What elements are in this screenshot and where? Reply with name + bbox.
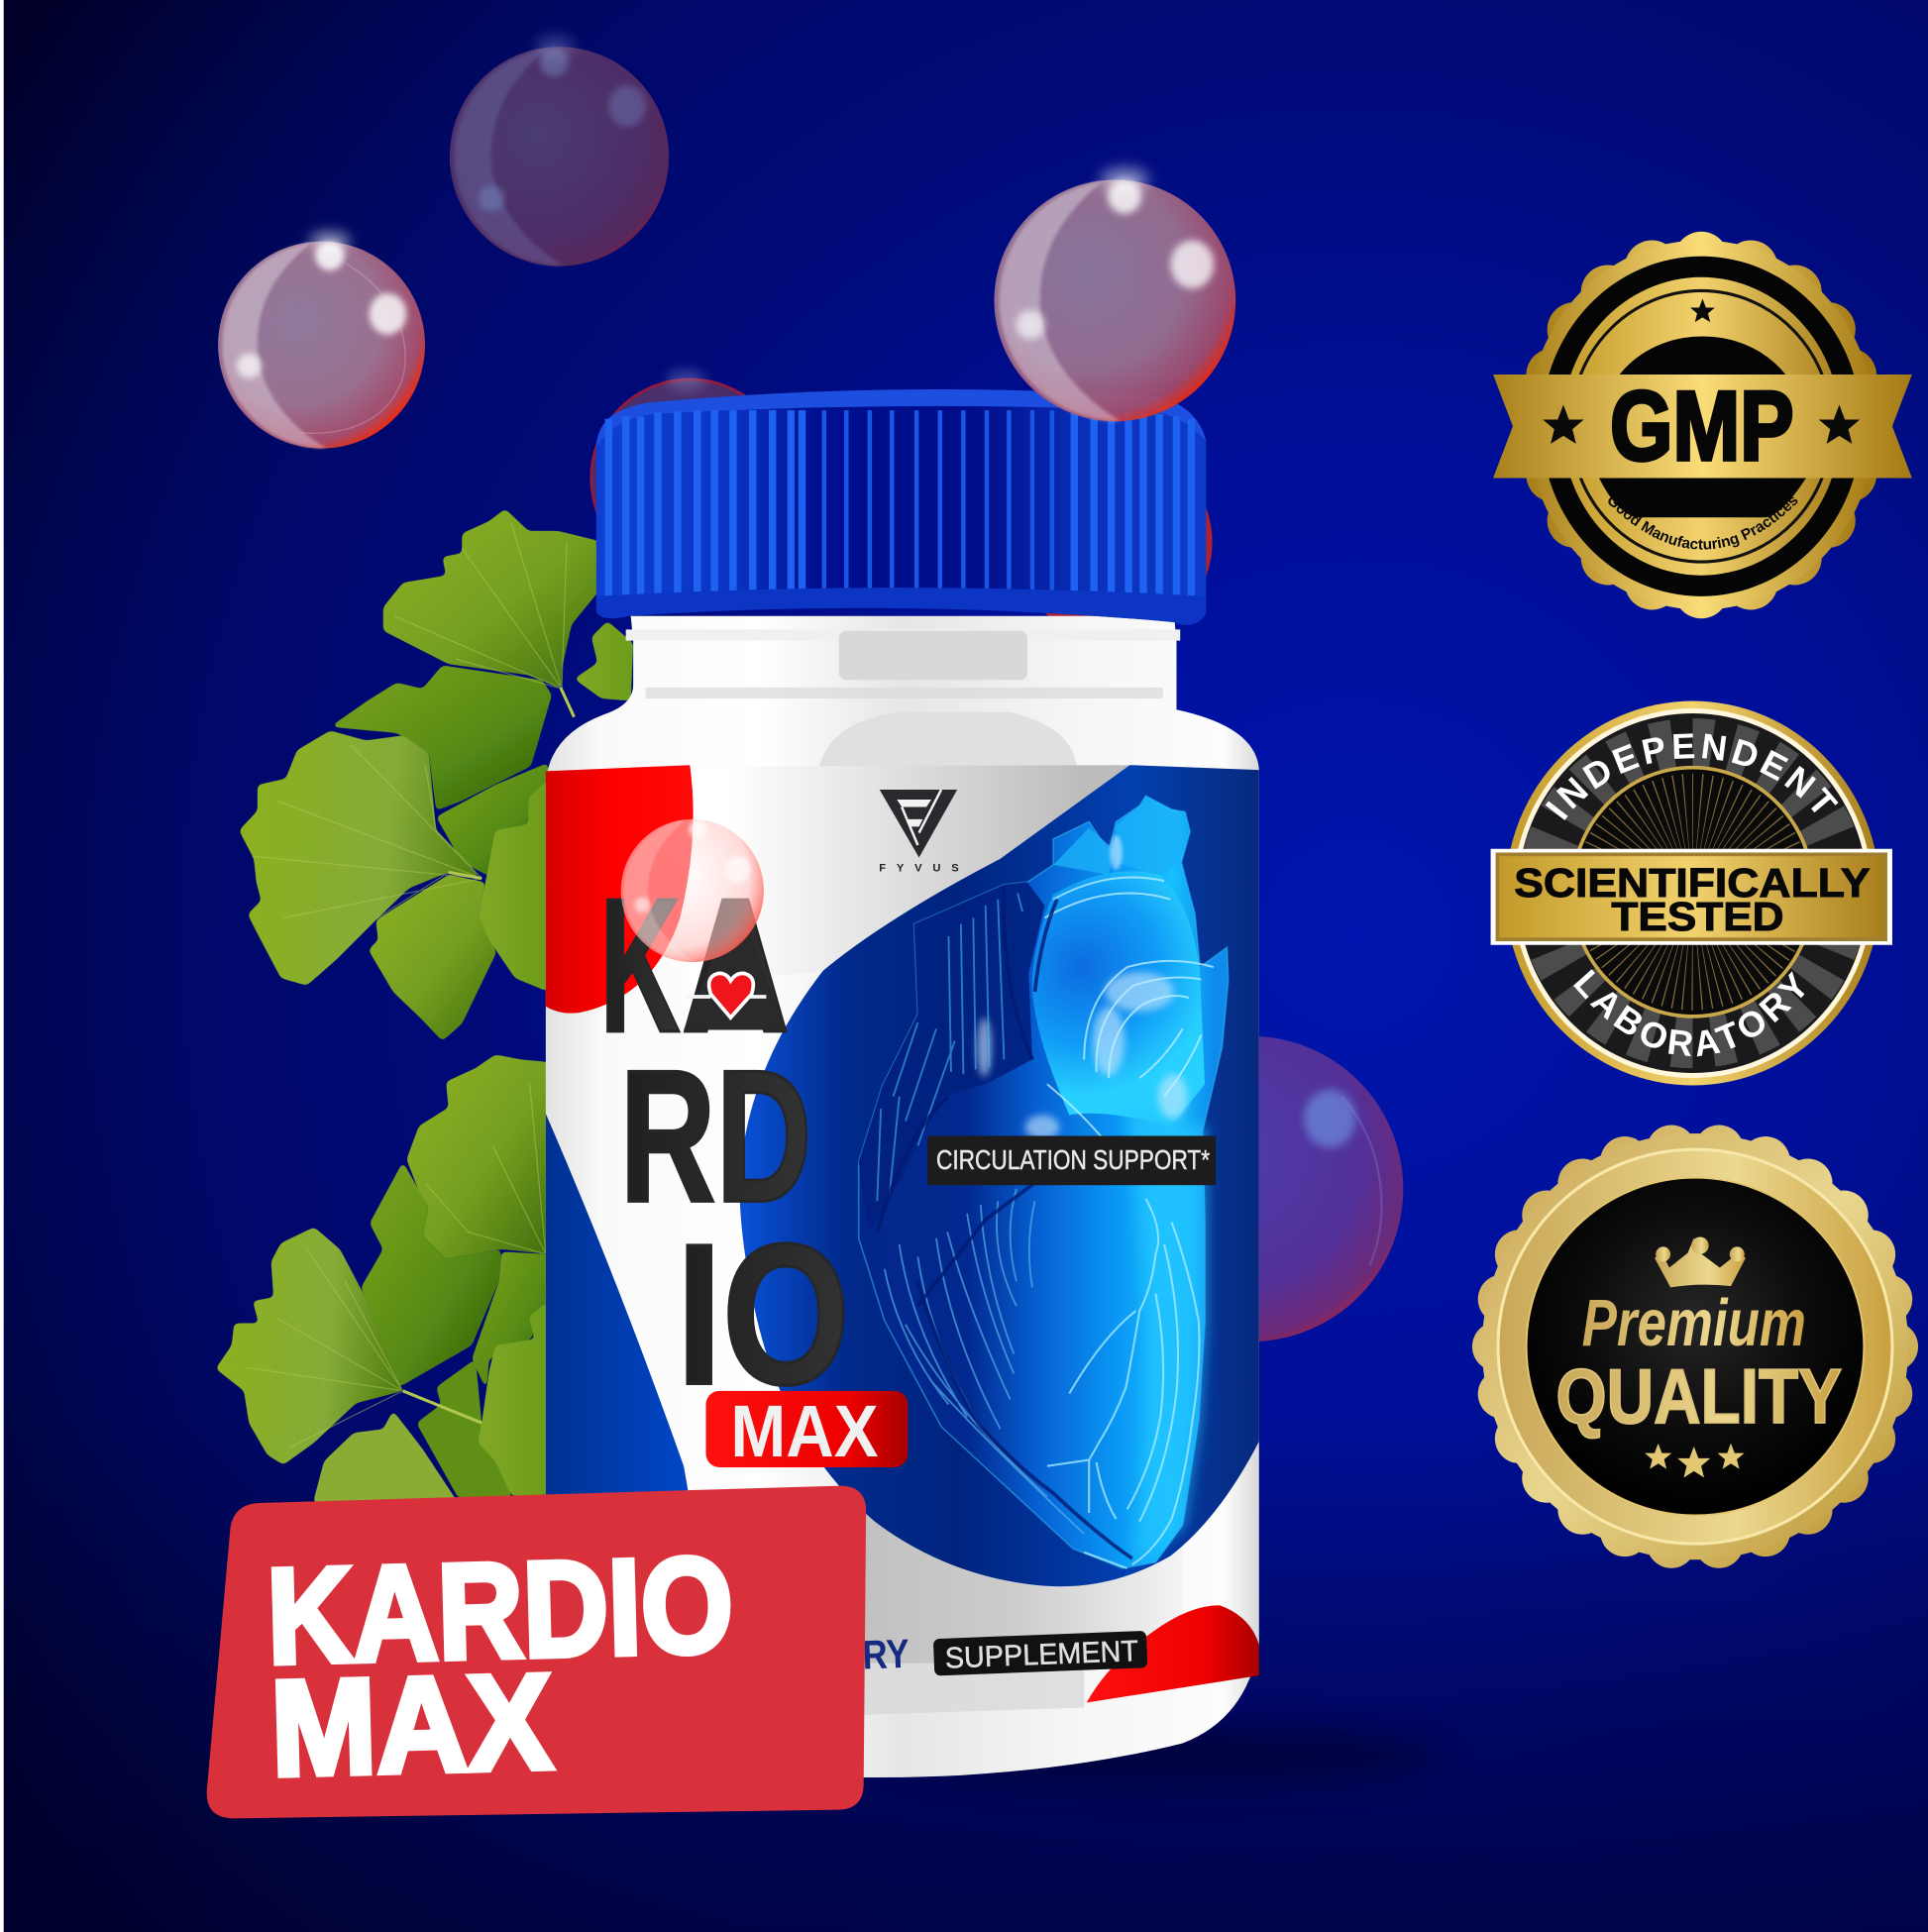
independent text: INDEPENDENT [1546,733,1839,820]
leaf stem [449,688,574,879]
bubble: right of bottle [1098,1036,1403,1342]
leaf: small centre [416,1359,512,1498]
leaf: small dark [472,1251,548,1391]
inner black top [1601,336,1803,514]
label: grey lower field [862,1509,1183,1664]
label: base shading [862,1664,1084,1715]
aorta tubes [1053,801,1183,875]
crown [1655,1238,1746,1287]
seal scallops [1547,259,1857,591]
scientifically text: SCIENTIFICALLY [1514,860,1871,906]
bubble: upper left [218,231,425,449]
lower bright panel [1127,1109,1205,1562]
label: grey upper field [690,765,1129,986]
cap body [596,389,1206,625]
banner gold [1499,856,1883,937]
tag shape [207,1486,866,1818]
logo mark [880,790,957,857]
leaf: dark back [361,1162,501,1387]
inner gold circle [1572,768,1813,1017]
leaf: large left [216,1227,403,1464]
label: red corner bottom [1087,1605,1259,1702]
dietary fragment: RY [862,1631,910,1678]
GMP text: GMP [1610,372,1793,482]
red product tag [207,1486,866,1818]
leaf veins and stems [253,523,567,919]
black centre [1527,1178,1864,1515]
letter A: A [682,859,790,1072]
sunburst [1633,831,1753,952]
white ring [1513,708,1873,1078]
leaf: right fan [478,779,548,992]
dark ring [1518,713,1868,1073]
leaf stem [403,1391,482,1423]
logo glyph lines [897,800,931,826]
cap top rim [596,389,1206,446]
cap lower band [596,588,1206,625]
heart strands: upper dark chamber [877,894,1022,1201]
tag text KARDIO: KARDIO [266,1528,735,1692]
leaf: upper [406,1054,548,1259]
label: red corner top [546,765,694,1014]
cap ribs side [608,410,1191,597]
letters RD: RD [619,1031,811,1241]
MAX pill: MAX [730,1389,879,1472]
banner inner line [1496,852,1887,941]
badge: GMP [1493,232,1912,618]
premium text: Premium [1582,1286,1806,1360]
leaf: dark back [330,665,552,810]
middle star [1677,1447,1710,1477]
label: blue swoosh left [546,1114,693,1515]
A solid triangle [684,903,788,1030]
label: blue circle field [740,765,1259,1586]
logo glyph diagonals [902,790,941,845]
black ring [1542,257,1862,596]
outer gold [1505,701,1880,1085]
top star [1690,299,1715,322]
tag text MAX: MAX [269,1645,554,1804]
heart illustration [859,796,1229,1568]
leaf: middle dark [436,763,548,876]
quality text: QUALITY [1555,1352,1842,1440]
bottle shadow [900,1726,1442,1785]
heart silhouette [859,796,1229,1568]
curve for text [1600,495,1805,550]
curve top [1555,758,1830,834]
bright ring [1498,1149,1892,1544]
aortic dome [1032,871,1205,1127]
inner black bottom [1599,478,1806,517]
heart dark chamber [859,882,1044,1232]
gold ring [1562,277,1841,576]
leaf: near neck [574,621,633,701]
leaf: bottom [313,1411,459,1503]
right star [1819,404,1860,444]
laboratory text: LABORATORY [1573,969,1805,1056]
heart dark lines [877,887,1132,1558]
leaf veins [247,1084,546,1448]
A cut lines [687,995,766,998]
supplement tag: SUPPLEMENT [944,1635,1139,1675]
band [1498,1149,1892,1544]
banner border [1491,849,1892,945]
left star [1543,404,1584,444]
cap ribs centre [824,410,1052,595]
logo wordmark: FYVUS [879,863,970,875]
circulation support tag [927,1135,1216,1185]
leaf: right fan [478,1301,548,1496]
leaf: large left [239,730,482,986]
product name [600,859,908,1472]
left star [1645,1444,1671,1469]
seal scallops [1497,1148,1893,1545]
right star [1717,1444,1745,1469]
tested text: TESTED [1611,894,1784,939]
letter K: K [600,859,680,1072]
seal base [1482,1133,1908,1559]
bubble: behind cap left [591,370,789,577]
badge: scientifically tested [1490,701,1892,1086]
bubble: upper middle [450,36,669,267]
logo: FYVUS [879,790,970,875]
pale highlights [977,835,1188,1139]
heart strands: lower left [885,1189,1084,1534]
letters IO: IO [677,1202,850,1426]
ring segments [1545,745,1841,1041]
bubble: on cap [994,167,1235,421]
ribbon [1493,375,1912,478]
bubble: on label [621,819,764,962]
seal base [1528,240,1875,610]
bottle body [546,616,1259,1777]
thin line [1570,290,1832,562]
heart strands: right veins [1047,1199,1199,1568]
neck shading [626,629,1180,766]
curve bottom [1559,968,1826,1056]
cap [596,389,1206,625]
badge: premium quality [1482,1133,1908,1559]
leaf: top [383,509,598,689]
leaf: lower fan [369,875,496,1041]
good manufacturing practices: Good Manufacturing Practices [1608,497,1797,550]
heart in A [709,973,753,1018]
circulation support tag: CIRCULATION SUPPORT* [936,1144,1210,1175]
ginkgo leaves: upper cluster [239,509,633,1041]
crown jewels [1656,1236,1745,1261]
ginkgo leaves: lower cluster [216,1054,548,1503]
bubble: behind cap right [1016,444,1213,641]
heart strands: swirl [1044,878,1214,1145]
bottle [546,616,1259,1777]
